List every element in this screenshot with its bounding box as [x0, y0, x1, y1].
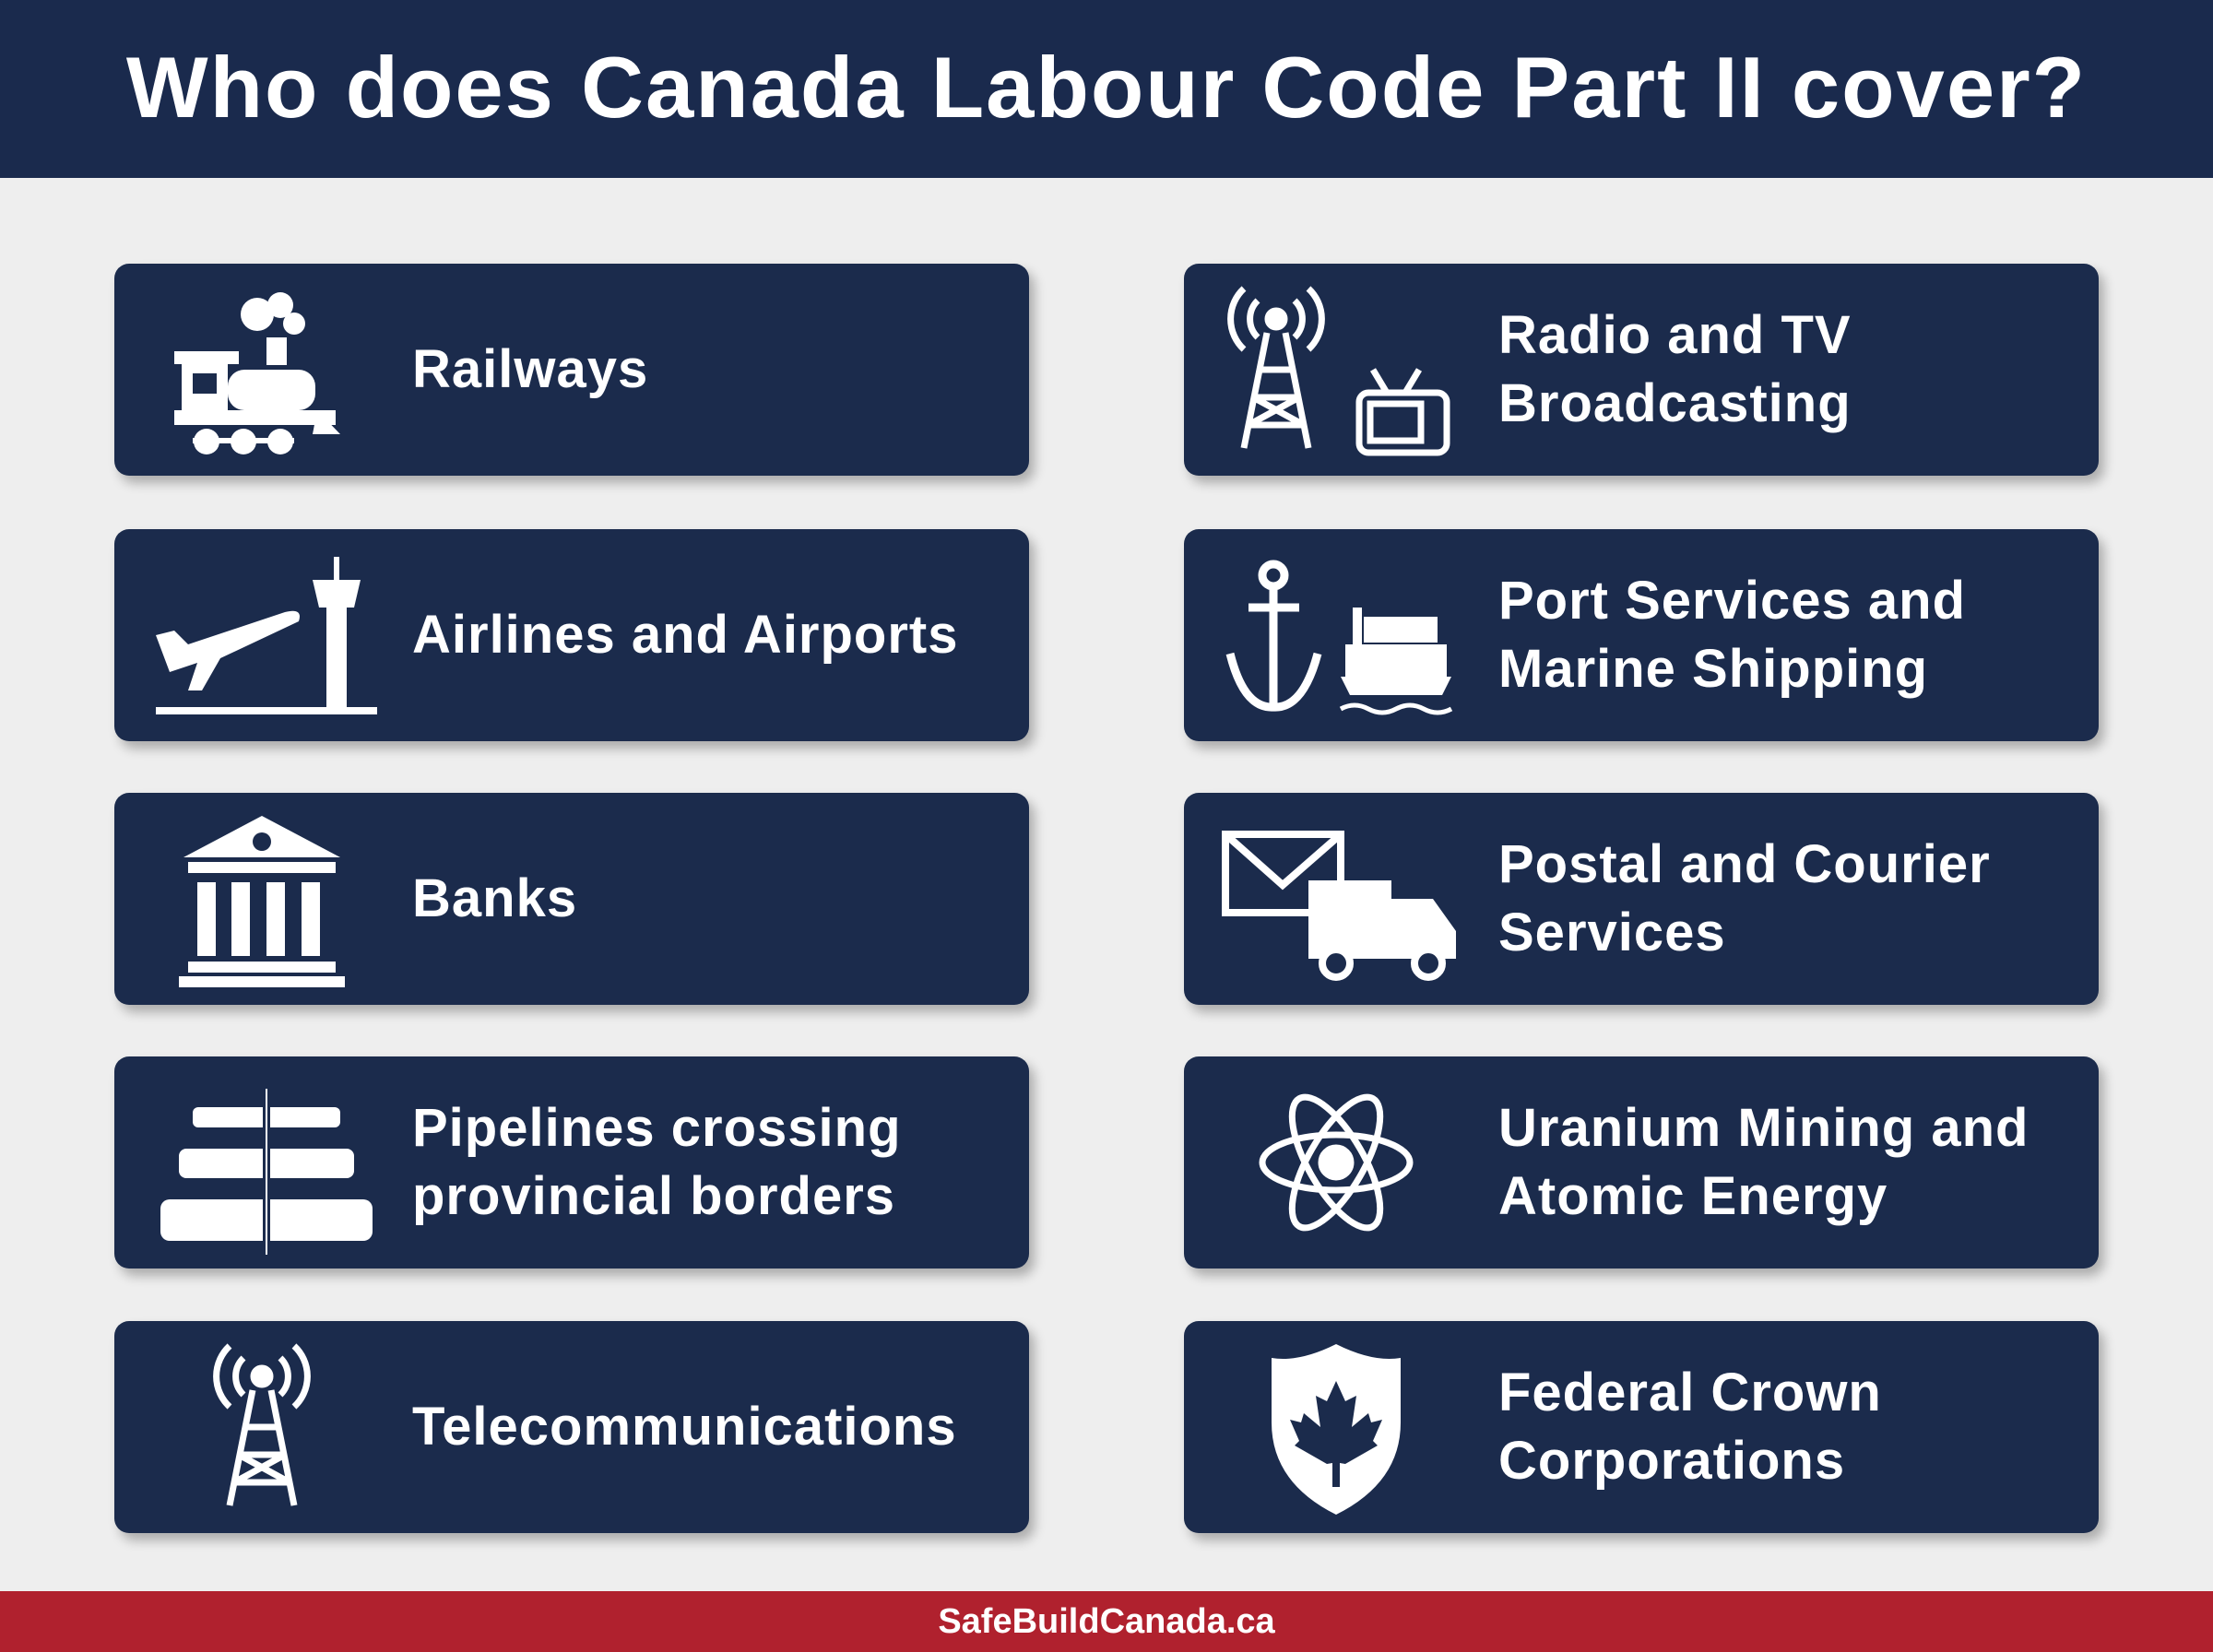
footer: [0, 1591, 2213, 1652]
icon: tower: [213, 1343, 311, 1506]
text: Corporations: [1498, 1431, 1845, 1491]
text: Broadcasting: [1498, 373, 1852, 433]
text: Services: [1498, 903, 1726, 962]
card: Railways: [114, 264, 1029, 476]
text: Telecommunications: [412, 1397, 957, 1457]
icon: atom: [1260, 1093, 1413, 1232]
text: Airlines and Airports: [412, 605, 959, 665]
card: Radio and TV: [1184, 264, 2099, 476]
card: Crown Corporations: [1184, 1321, 2099, 1533]
icon: plane and tower: [156, 557, 377, 714]
card: Postal: [1184, 793, 2099, 1005]
text: Uranium Mining and: [1498, 1098, 2029, 1158]
card: Port: [1184, 529, 2099, 741]
card: Telecommunications: [114, 1321, 1029, 1533]
icon: bank: [179, 816, 345, 987]
icon: train: [174, 292, 340, 454]
text: Railways: [412, 339, 648, 399]
text: Federal Crown: [1498, 1363, 1882, 1422]
icon: shield with maple leaf: [1272, 1344, 1401, 1515]
text: Radio and TV: [1498, 305, 1852, 365]
icon: pipelines: [160, 1089, 373, 1255]
title: [0, 0, 2213, 178]
text: Marine Shipping: [1498, 639, 1928, 699]
icon: envelope and truck: [1222, 831, 1456, 981]
text: Port Services and: [1498, 571, 1966, 631]
title: Who does Canada Labour Code Part II cover?: [126, 39, 2087, 136]
text: Atomic Energy: [1498, 1166, 1888, 1226]
text: Pipelines crossing: [412, 1098, 902, 1158]
card: Uranium: [1184, 1056, 2099, 1268]
text: [1498, 834, 1991, 962]
text: [1498, 305, 1852, 433]
text: [1498, 571, 1966, 699]
text: Banks: [412, 868, 577, 928]
text: Postal and Courier: [1498, 834, 1991, 894]
icon: anchor and ship: [1226, 560, 1453, 715]
footer: SafeBuildCanada.ca: [938, 1602, 1275, 1641]
card: Banks: [114, 793, 1029, 1005]
text: [412, 1098, 902, 1226]
card: Pipelines: [114, 1056, 1029, 1268]
text: provincial borders: [412, 1166, 895, 1226]
card: Airlines: [114, 529, 1029, 741]
text: [1498, 1098, 2029, 1226]
icon: broadcast tower and tv: [1227, 286, 1450, 455]
text: [1498, 1363, 1882, 1491]
